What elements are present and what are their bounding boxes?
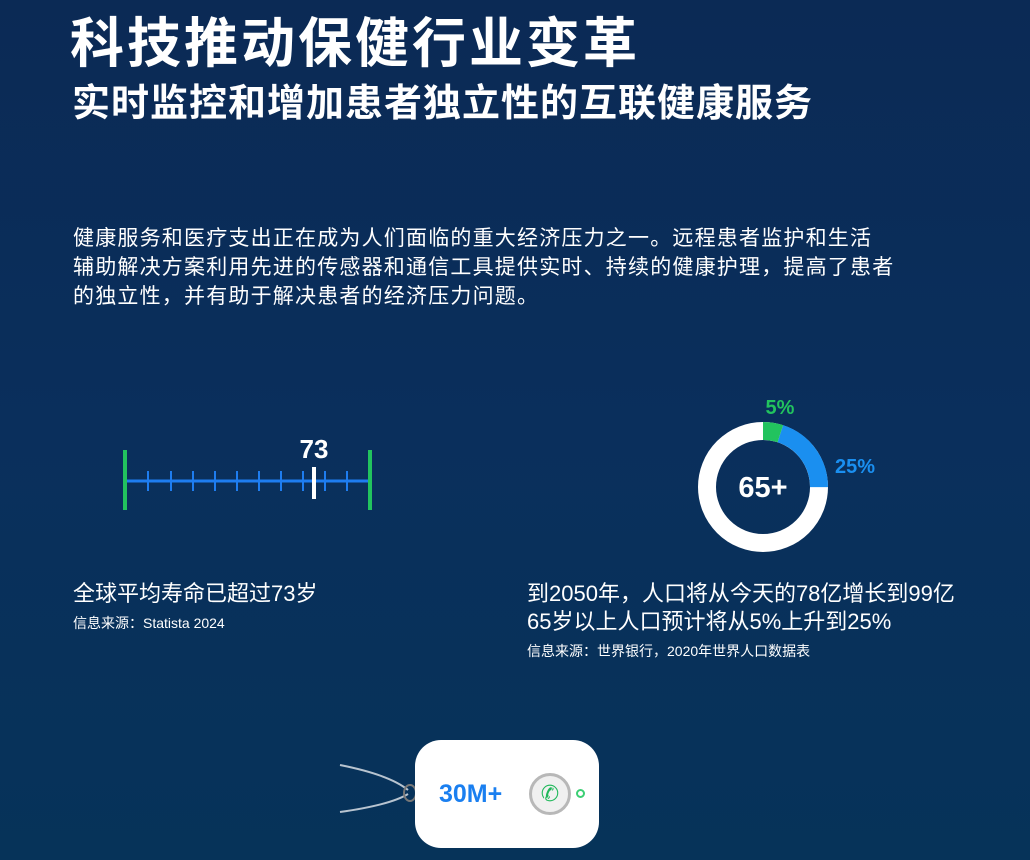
intro text: 的独立性，并有助于解决患者的经济压力问题。 [73,285,539,308]
cable [340,764,415,813]
right caption: 65岁以上人口预计将从5%上升到25% [527,609,891,634]
card: 30M+ calls [415,740,599,848]
left caption: 信息来源：Statista 2024 [73,615,225,631]
right caption [527,581,955,659]
ruler chart: life expectancy [123,434,372,510]
icon: phone: ✆ [541,781,559,806]
title: 科技推动保健行业变革 [70,14,640,74]
intro text: 健康服务和医疗支出正在成为人们面临的重大经济压力之一。远程患者监护和生活 [73,227,872,250]
intro text: 辅助解决方案利用先进的传感器和通信工具提供实时、持续的健康护理，提高了患者 [73,256,894,279]
right caption: 信息来源：世界银行，2020年世界人口数据表 [527,643,810,659]
donut chart: 65+: 25% [835,456,875,478]
icon: phone [529,773,571,815]
donut chart: 65+: 5% [766,397,795,419]
subtitle: 实时监控和增加患者独立性的互联健康服务 [72,83,813,125]
left caption [73,581,317,631]
ruler chart: life expectancy: 73 [300,434,328,464]
left caption: 全球平均寿命已超过73岁 [73,581,317,606]
intro text [73,226,894,308]
donut chart: 65+: 65+ [738,472,788,504]
donut chart: 65+ [698,397,875,552]
right caption: 到2050年，人口将从今天的78亿增长到99亿 [527,581,955,606]
card: 30M+ calls: 30M+ [439,780,502,808]
